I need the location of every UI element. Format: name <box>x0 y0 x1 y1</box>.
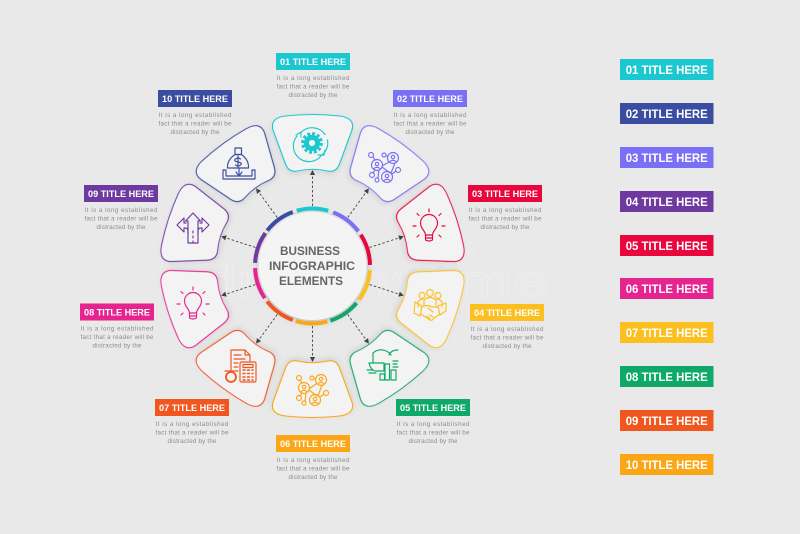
legend 07 <box>620 322 714 343</box>
legend 02: 02 TITLE HERE <box>626 107 708 121</box>
card 04 outline <box>390 257 469 351</box>
label 02: It is a long established <box>394 112 467 119</box>
label 08: distracted by the <box>92 342 142 350</box>
label 04: fact that a reader will be <box>470 334 544 342</box>
label 10 <box>158 90 232 136</box>
icon: light bulb red <box>413 209 445 241</box>
label 03: It is a long established <box>468 207 542 214</box>
label 05: distracted by the <box>408 438 458 445</box>
arrow 10 <box>254 187 279 219</box>
legend 04: 04 TITLE HERE <box>626 195 708 209</box>
legend 05 <box>620 235 714 256</box>
label 10: fact that a reader will be <box>158 120 232 128</box>
legend 06 <box>620 278 714 299</box>
legend 06: 06 TITLE HERE <box>626 282 708 296</box>
label 07: fact that a reader will be <box>156 430 229 436</box>
hub disc <box>258 212 366 320</box>
label 09: fact that a reader will be <box>84 216 158 222</box>
legend 04 <box>620 191 714 212</box>
label 09: It is a long established <box>84 207 158 214</box>
label 08 <box>80 304 154 350</box>
legend 05: 05 TITLE HERE <box>626 239 708 253</box>
card 05 outline <box>336 319 434 412</box>
label 03 <box>468 185 542 231</box>
label 02 <box>393 90 467 136</box>
legend 10: 10 TITLE HERE <box>626 458 708 472</box>
label 06: distracted by the <box>288 474 338 481</box>
card 03 outline <box>390 181 469 275</box>
label 03: distracted by the <box>480 224 530 231</box>
card 10 outline <box>191 120 289 213</box>
arrow 05 <box>346 313 371 345</box>
card 06 outline <box>272 361 353 418</box>
legend 01: 01 TITLE HERE <box>626 63 708 77</box>
hub colored ring <box>253 208 372 324</box>
icon: growth chart <box>367 350 398 380</box>
icon: invoice, calculator and coin <box>225 350 256 382</box>
label 05 <box>396 399 470 445</box>
label 04: distracted by the <box>482 343 532 350</box>
card 09 outline <box>156 181 235 275</box>
arrow 04 <box>369 282 405 298</box>
label 01: distracted by the <box>288 92 338 99</box>
card 01 outline <box>272 114 353 171</box>
label 09 <box>84 185 158 231</box>
label 06 <box>276 435 350 481</box>
label 10: It is a long established <box>158 112 232 119</box>
arrow 08 <box>220 282 256 298</box>
icon: light bulb pink <box>177 287 209 319</box>
icon: money bag and tray <box>223 148 255 179</box>
label 05: 05 TITLE HERE <box>400 403 467 414</box>
label 01: fact that a reader will be <box>276 84 350 90</box>
icon: people network 06 <box>296 374 328 406</box>
legend 08 <box>620 366 714 387</box>
legend 03: 03 TITLE HERE <box>626 151 708 165</box>
arrow 01 <box>310 170 315 206</box>
legend 03 <box>620 147 714 168</box>
label 07: distracted by the <box>168 438 217 445</box>
label 05: It is a long established <box>396 421 470 428</box>
card 02 outline <box>336 120 434 213</box>
label 07 <box>155 399 229 445</box>
card 08 outline <box>156 257 235 351</box>
hub title: INFOGRAPHIC <box>269 259 355 273</box>
legend 09: 09 TITLE HERE <box>626 414 708 428</box>
arrows from hub to cards <box>220 170 405 362</box>
label 07: 07 TITLE HERE <box>159 403 226 414</box>
icon: gear with cycle arrows <box>293 128 328 162</box>
label 04 <box>470 304 544 350</box>
label 05: fact that a reader will be <box>396 430 470 436</box>
icon: handshake with team <box>414 290 446 320</box>
label 02: 02 TITLE HERE <box>397 94 464 105</box>
icon: people network 02 <box>368 152 400 182</box>
legend 01 <box>620 59 714 80</box>
label 09: 09 TITLE HERE <box>88 189 155 200</box>
label 06: fact that a reader will be <box>276 466 350 472</box>
icon: direction arrows <box>177 213 209 243</box>
watermark <box>200 238 550 307</box>
hub title: BUSINESS <box>280 244 340 258</box>
hub title: ELEMENTS <box>279 274 343 288</box>
label 09: distracted by the <box>96 224 146 231</box>
label 04: 04 TITLE HERE <box>474 308 541 319</box>
label 02: distracted by the <box>406 129 455 136</box>
card 07 outline <box>191 319 289 412</box>
arrow 07 <box>254 313 279 345</box>
legend 10 <box>620 454 714 475</box>
watermark: dreamstime <box>200 255 550 307</box>
label 04: It is a long established <box>470 326 544 333</box>
label 10: distracted by the <box>170 129 220 136</box>
label 06: It is a long established <box>276 457 350 464</box>
arrow 02 <box>346 187 371 219</box>
label 08: fact that a reader will be <box>80 334 154 341</box>
label 10: 10 TITLE HERE <box>162 94 229 105</box>
label 08: 08 TITLE HERE <box>84 308 151 318</box>
hub title <box>269 244 355 288</box>
label 07: It is a long established <box>156 421 229 428</box>
arrow 09 <box>220 234 256 250</box>
arrow 03 <box>369 234 405 250</box>
legend 09 <box>620 410 714 431</box>
label 01 <box>276 53 350 99</box>
legend 02 <box>620 103 714 124</box>
label 01: It is a long established <box>276 75 350 82</box>
label 01: 01 TITLE HERE <box>280 57 347 68</box>
legend column <box>620 59 714 475</box>
arrow 06 <box>310 326 315 362</box>
label 06: 06 TITLE HERE <box>280 439 347 450</box>
label 08: It is a long established <box>80 326 154 332</box>
legend 08: 08 TITLE HERE <box>626 370 708 384</box>
legend 07: 07 TITLE HERE <box>626 326 708 340</box>
label 03: fact that a reader will be <box>468 216 542 222</box>
label 02: fact that a reader will be <box>394 120 467 128</box>
label 03: 03 TITLE HERE <box>472 189 539 200</box>
